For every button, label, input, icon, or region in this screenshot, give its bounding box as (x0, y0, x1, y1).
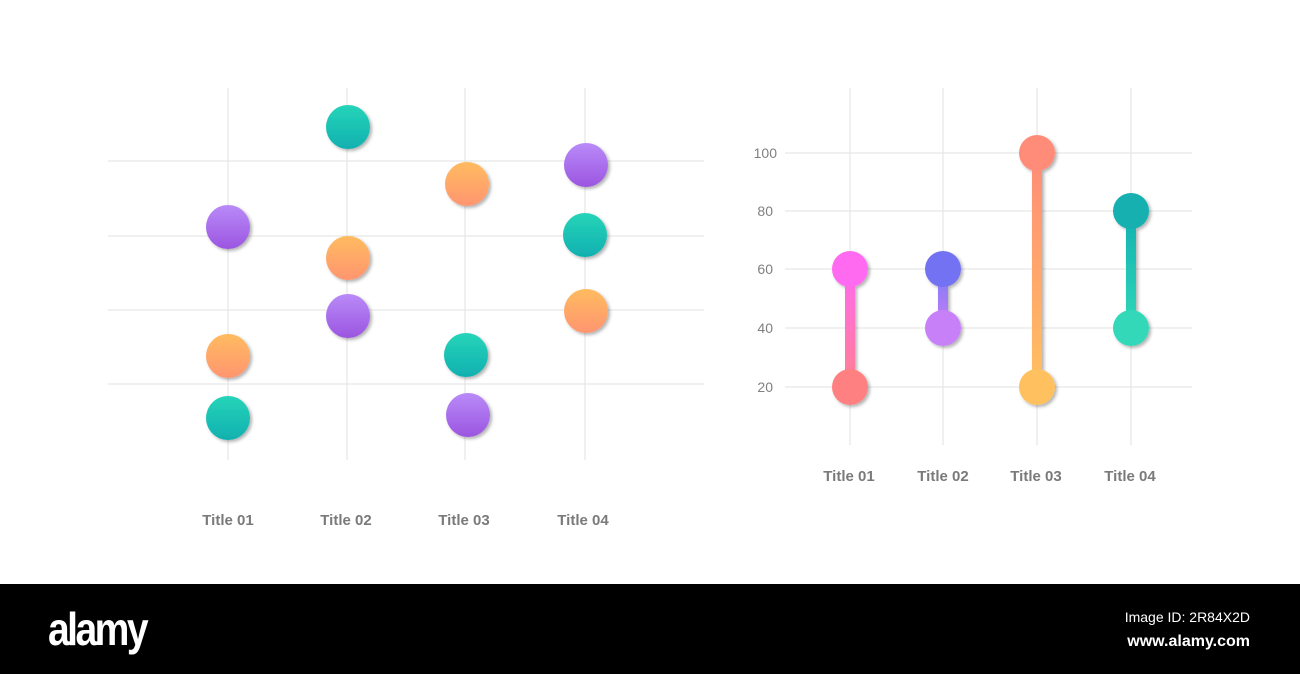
chart: left dot plot (108, 88, 704, 529)
y axis labels: 40 (757, 320, 773, 336)
image id: Image ID: 2R84X2D (1125, 609, 1250, 625)
y axis labels (754, 145, 777, 395)
dumbbells (832, 135, 1149, 405)
labels: left chart (202, 512, 609, 529)
labels: right chart: Title 04 (1104, 468, 1156, 485)
labels: right chart (823, 468, 1156, 485)
y axis labels: 80 (757, 203, 773, 219)
y axis labels: 20 (757, 379, 773, 395)
chart: right dumbbell (754, 88, 1192, 485)
logo text: alamy (48, 604, 149, 656)
labels: left chart: Title 03 (438, 512, 490, 529)
labels: left chart: Title 01 (202, 512, 254, 529)
y axis labels: 100 (754, 145, 777, 161)
labels: left chart: Title 04 (557, 512, 609, 529)
footer banner: www.alamy.com (1126, 633, 1250, 650)
labels: right chart: Title 03 (1010, 468, 1062, 485)
dots: left chart (206, 105, 608, 440)
labels: right chart: Title 02 (917, 468, 969, 485)
labels: left chart: Title 02 (320, 512, 372, 529)
y axis labels: 60 (757, 261, 773, 277)
labels: right chart: Title 01 (823, 468, 875, 485)
footer banner (0, 584, 1300, 674)
